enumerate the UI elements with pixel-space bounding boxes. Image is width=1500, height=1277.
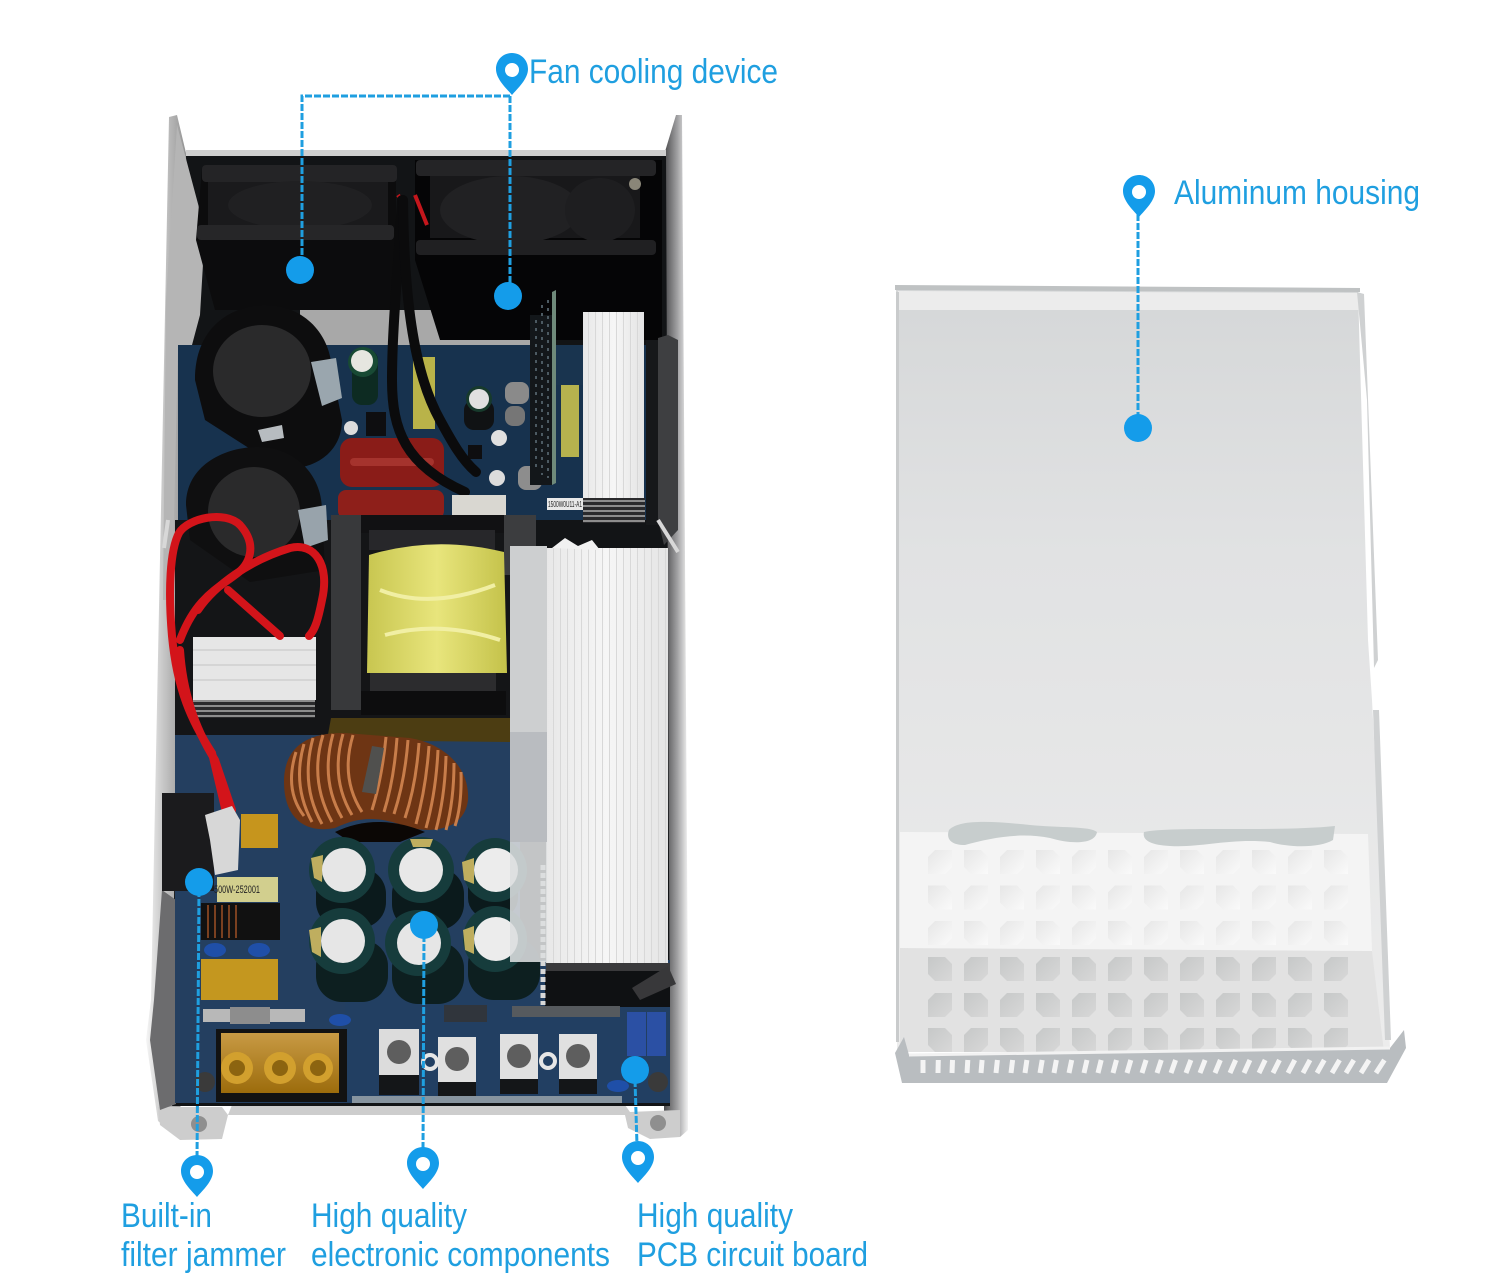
small PCB components bbox=[344, 347, 542, 490]
filter coil bbox=[201, 903, 280, 940]
dark interior bbox=[172, 156, 670, 1106]
top speckled strip bbox=[898, 291, 1359, 310]
fuse bbox=[203, 1007, 305, 1024]
X capacitor bbox=[201, 959, 278, 1000]
icon: map pin bbox=[181, 1155, 213, 1197]
product photo: aluminum cover bbox=[895, 285, 1406, 1083]
electrolytic capacitors row bbox=[309, 837, 540, 1004]
dot bbox=[185, 868, 213, 896]
label: PCB circuit board bbox=[637, 1236, 868, 1274]
label: filter jammer bbox=[121, 1236, 286, 1274]
label: electronic components bbox=[311, 1236, 610, 1274]
slots bbox=[923, 1060, 1384, 1073]
dot: right fan bbox=[494, 282, 522, 310]
capacitor 1 bbox=[309, 837, 386, 928]
front slotted lip bbox=[895, 1030, 1406, 1083]
large capacitors bbox=[186, 305, 342, 582]
dashed leader line bbox=[1136, 214, 1140, 416]
callout: high quality electronic components bbox=[311, 911, 610, 1274]
capacitor lower bbox=[186, 447, 328, 582]
capacitor 6 bbox=[463, 906, 540, 1000]
red film capacitors bbox=[338, 438, 444, 519]
fan wires bbox=[398, 195, 427, 225]
toroid copper inductor bbox=[284, 733, 468, 842]
dashed leader line bbox=[635, 1080, 637, 1145]
dot bbox=[1124, 414, 1152, 442]
lower vent band bbox=[900, 948, 1384, 1052]
capacitor 3 bbox=[462, 838, 527, 918]
board label bbox=[547, 498, 583, 510]
label: High quality bbox=[311, 1197, 467, 1235]
label: Fan cooling device bbox=[529, 53, 778, 91]
main PCB board bbox=[178, 345, 668, 520]
glue strips bbox=[948, 822, 1335, 846]
small heat sink left bbox=[193, 637, 316, 718]
product photo: open power supply bbox=[146, 115, 688, 1140]
small heat sink top bbox=[547, 312, 645, 523]
top folded edge bbox=[895, 285, 1360, 292]
right inner wall bbox=[164, 335, 678, 552]
icon: map pin bbox=[496, 53, 528, 95]
callout: high quality PCB circuit board bbox=[621, 1056, 868, 1274]
dot: left fan bbox=[286, 256, 314, 284]
callout: built-in filter jammer bbox=[121, 868, 286, 1274]
dot bbox=[410, 911, 438, 939]
upper vent holes bbox=[928, 850, 1348, 945]
choke label bbox=[214, 877, 278, 902]
SMD parts and trimmers bbox=[195, 1005, 668, 1103]
capacitor 5 bbox=[385, 910, 464, 1004]
icon: map pin bbox=[622, 1141, 654, 1183]
black fan cables bbox=[392, 200, 476, 492]
solder joint bbox=[205, 806, 240, 875]
label: Built-in bbox=[121, 1197, 212, 1235]
big heat sink bbox=[543, 538, 676, 1007]
upright control board bbox=[530, 290, 583, 485]
callout: aluminum housing bbox=[1123, 174, 1420, 442]
blue ceramic capacitors bbox=[204, 943, 629, 1092]
lower left wall shading bbox=[150, 890, 176, 1110]
label: High quality bbox=[637, 1197, 793, 1235]
right side wall bbox=[1357, 292, 1378, 668]
filter section parts bbox=[162, 793, 629, 1092]
dot bbox=[621, 1056, 649, 1084]
label: Aluminum housing bbox=[1174, 174, 1420, 212]
dashed leader line bbox=[423, 935, 424, 1150]
dashed leader line bbox=[197, 890, 199, 1160]
capacitor 4 bbox=[309, 908, 388, 1002]
side wall shading bbox=[163, 125, 205, 600]
fan right bbox=[415, 160, 662, 340]
output screw terminals bbox=[379, 1029, 597, 1096]
icon: map pin bbox=[407, 1147, 439, 1189]
cooling fans bbox=[196, 160, 662, 340]
callout: fan cooling device bbox=[286, 53, 778, 310]
fan left bbox=[196, 165, 397, 310]
translucent film over heat sink edge bbox=[510, 546, 547, 962]
capacitor upper bbox=[195, 305, 342, 469]
capacitor 2 bbox=[388, 837, 464, 930]
gray back plate strip bbox=[300, 310, 540, 348]
choke label: 500W-252001 bbox=[214, 884, 260, 896]
cover plate bbox=[896, 286, 1390, 1050]
yellow capacitor bbox=[241, 814, 278, 848]
transformer bbox=[327, 515, 536, 742]
chassis walls and flanges bbox=[146, 115, 688, 1140]
lower vent holes bbox=[928, 957, 1348, 1052]
red wires bbox=[170, 517, 324, 810]
icon: map pin bbox=[1123, 175, 1155, 217]
white block connector bbox=[452, 495, 506, 520]
light upper vent band bbox=[900, 832, 1372, 951]
terminal block bbox=[216, 1029, 347, 1102]
input connector bbox=[162, 793, 214, 891]
left edge bbox=[896, 292, 899, 1042]
dashed leader lines bbox=[302, 96, 510, 294]
board label: 1500W0U11-A1 bbox=[548, 500, 582, 509]
